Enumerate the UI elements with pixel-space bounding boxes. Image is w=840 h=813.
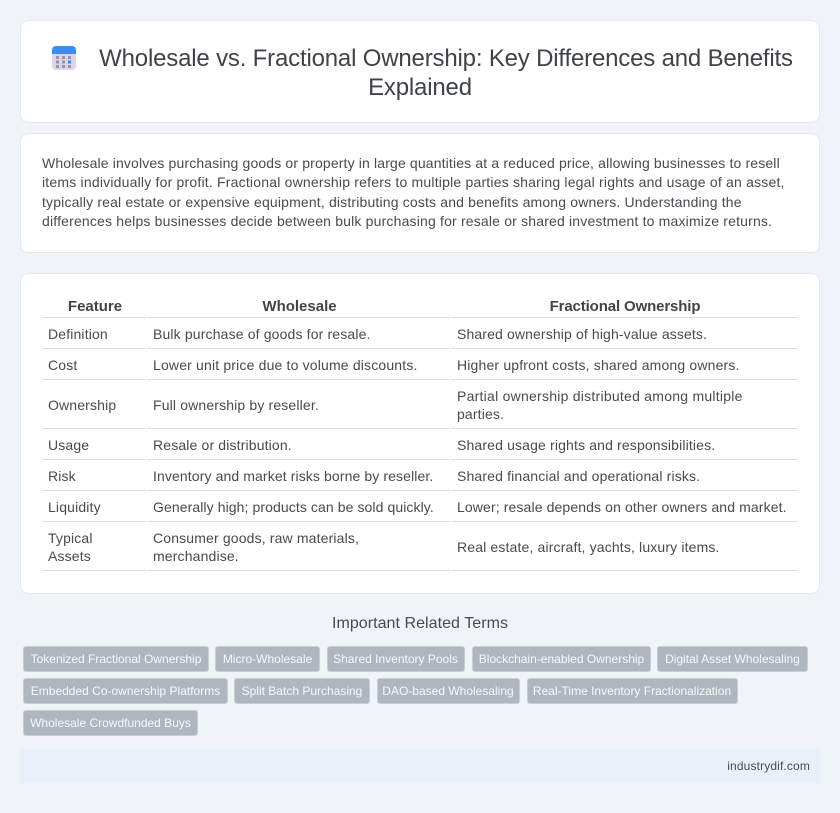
title: Wholesale vs. Fractional Ownership: Key Differences and Benefits — [99, 45, 793, 72]
row: liquidity — [48, 499, 787, 515]
tag list: related terms: Embedded Co-ownership Platforms — [31, 684, 220, 698]
text block: introduction — [42, 155, 785, 229]
text block: introduction: items individually for profit. Fractional ownership refers to multiple parties sharing legal rights and usage of an asset, — [42, 174, 785, 190]
table header: Fractional Ownership — [550, 298, 700, 315]
row: typical assets: Consumer goods, raw materials, — [153, 530, 359, 546]
row: liquidity: Liquidity — [48, 499, 101, 515]
row: typical assets: Assets — [48, 548, 91, 564]
tag list: related terms: Wholesale Crowdfunded Buys — [30, 716, 191, 730]
row: ownership: Partial ownership distributed among multiple — [457, 388, 743, 404]
row: risk: Shared financial and operational risks. — [457, 468, 700, 484]
tag list: related terms — [23, 646, 808, 736]
row: risk — [48, 468, 700, 484]
row: definition: Shared ownership of high-value assets. — [457, 326, 707, 342]
row: ownership: Ownership — [48, 397, 116, 413]
text block: introduction: typically real estate or expensive equipment, distributing costs and benefits among owners. Understanding the — [42, 194, 742, 210]
tag list: related terms: Digital Asset Wholesaling — [665, 652, 800, 666]
row: cost: Cost — [48, 357, 77, 373]
row: risk: Risk — [48, 468, 76, 484]
text block: introduction: Wholesale involves purchasing goods or property in large quantities at a reduced price, allowing businesses to resell — [42, 155, 780, 171]
row: usage: Resale or distribution. — [153, 437, 292, 453]
row: liquidity: Lower; resale depends on other owners and market. — [457, 499, 787, 515]
row: cost: Higher upfront costs, shared among owners. — [457, 357, 740, 373]
panel: introduction — [20, 133, 820, 253]
title — [99, 45, 793, 101]
row: typical assets: Typical — [48, 530, 93, 546]
row: risk: Inventory and market risks borne by reseller. — [153, 468, 433, 484]
row: definition — [48, 326, 707, 342]
panel: title card — [20, 20, 820, 123]
row: definition: Bulk purchase of goods for resale. — [153, 326, 371, 342]
row: typical assets: merchandise. — [153, 548, 239, 564]
row: ownership: parties. — [457, 406, 504, 422]
table header: Wholesale — [262, 298, 337, 315]
title: Explained — [368, 74, 472, 101]
row: typical assets — [48, 530, 720, 564]
panel: comparison table — [20, 273, 820, 594]
footer source text: industrydif.com — [727, 759, 810, 773]
row: definition: Definition — [48, 326, 108, 342]
icon: calendar — [52, 46, 76, 70]
row: ownership — [48, 388, 743, 422]
table header — [68, 298, 700, 315]
row: cost — [48, 357, 740, 373]
tag list: related terms: DAO-based Wholesaling — [382, 684, 514, 698]
heading: related terms: Important Related Terms — [332, 615, 508, 632]
row: ownership: Full ownership by reseller. — [153, 397, 319, 413]
row: cost: Lower unit price due to volume discounts. — [153, 357, 418, 373]
row: typical assets: Real estate, aircraft, yachts, luxury items. — [457, 539, 720, 555]
tag list: related terms: Split Batch Purchasing — [242, 684, 362, 698]
tag list: related terms: Micro-Wholesale — [223, 652, 312, 666]
row: liquidity: Generally high; products can be sold quickly. — [153, 499, 434, 515]
row: usage — [48, 437, 715, 453]
footer — [20, 749, 820, 783]
tag list: related terms: Tokenized Fractional Ownership — [31, 652, 201, 666]
text block: introduction: differences helps businesses decide between bulk purchasing for resale or shared investment to maximize returns. — [42, 213, 772, 229]
tag list: related terms: Blockchain-enabled Ownership — [479, 652, 644, 666]
table header: Feature — [68, 298, 122, 315]
tag list: related terms: Shared Inventory Pools — [333, 652, 458, 666]
row: usage: Usage — [48, 437, 89, 453]
tag list: related terms: Real-Time Inventory Fractionalization — [533, 684, 731, 698]
row: usage: Shared usage rights and responsibilities. — [457, 437, 715, 453]
